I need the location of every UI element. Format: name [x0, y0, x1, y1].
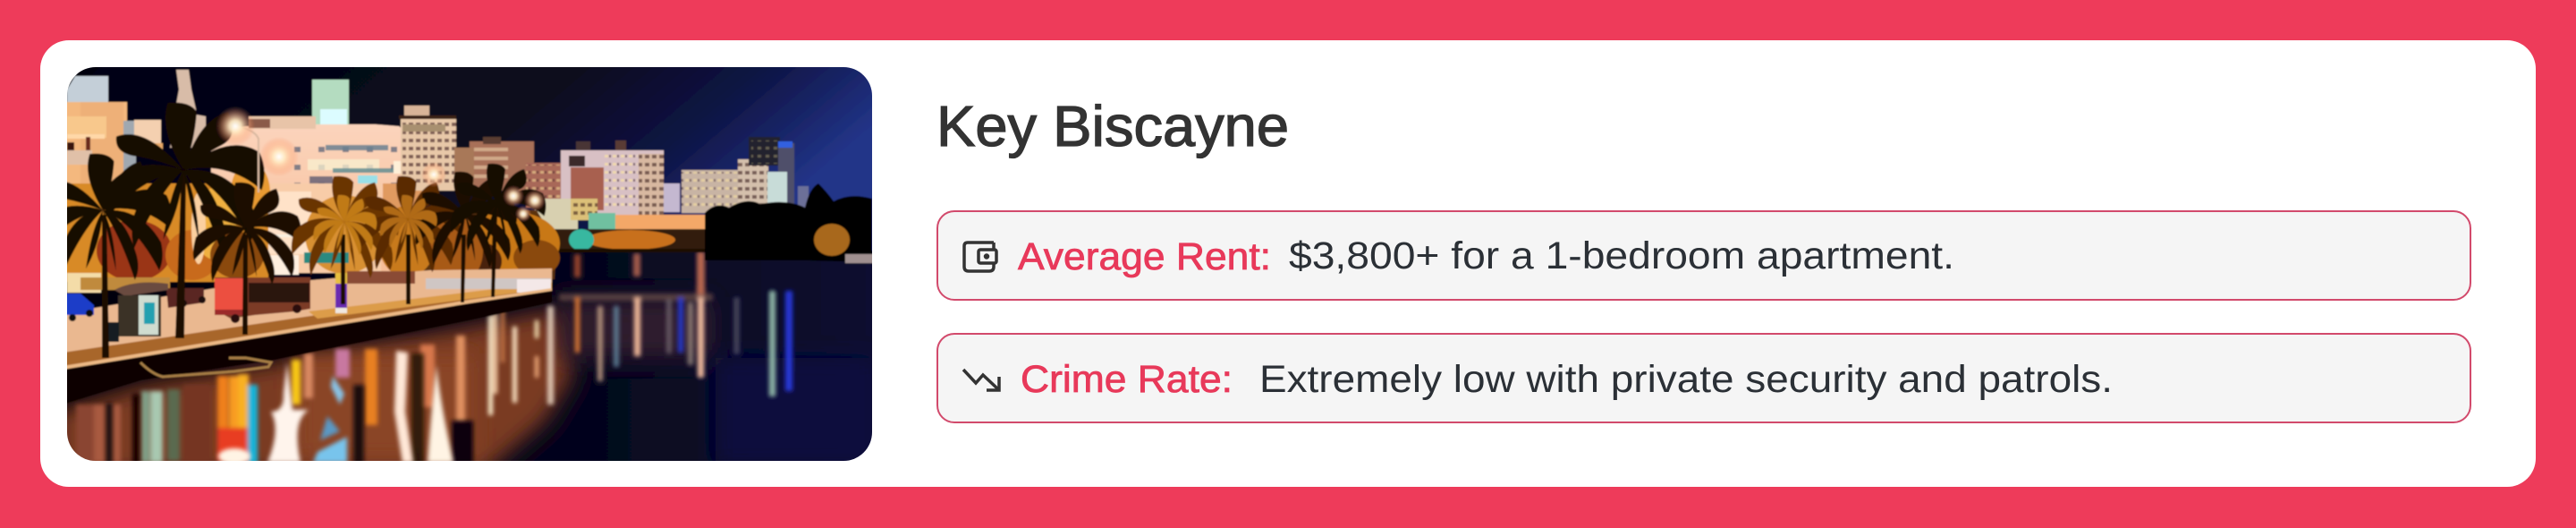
boat — [140, 358, 271, 377]
label: average rent: Average Rent: — [1018, 235, 1271, 278]
navy haze lower right — [716, 358, 877, 465]
railing — [426, 278, 551, 293]
blue car — [63, 294, 94, 321]
palm trees — [38, 103, 546, 285]
parked cars — [347, 271, 415, 284]
condo tower right of hotel — [399, 106, 474, 191]
amber foliage band behind palms — [63, 162, 483, 285]
night sky — [67, 67, 872, 251]
street lamps — [216, 106, 546, 222]
purple sign — [335, 273, 347, 313]
embankment wall — [63, 290, 552, 405]
central hotel — [211, 116, 428, 273]
bus shelter — [106, 283, 168, 342]
icon: wallet — [964, 243, 996, 271]
grass verge — [67, 292, 519, 366]
reflections right — [559, 251, 792, 396]
panel: crime rate — [937, 334, 2470, 422]
icon: trending down arrow — [963, 370, 999, 390]
red truck — [166, 288, 206, 308]
spire — [170, 70, 206, 148]
tree trunks — [102, 170, 497, 358]
bus — [215, 277, 310, 323]
value: rent: $3,800+ for a 1-bedroom apartment. — [1289, 234, 1954, 277]
teal penthouse — [312, 80, 349, 126]
photo: waterfront skyline at night — [38, 63, 877, 474]
left building — [67, 100, 165, 184]
label: crime rate: Crime Rate: — [1021, 358, 1233, 401]
reflections left — [76, 336, 465, 464]
value: crime: Extremely low with private security and patrols. — [1259, 358, 2113, 401]
panel: average rent — [937, 211, 2470, 300]
purple haze mid water — [559, 297, 716, 360]
water base — [63, 251, 877, 465]
heading: Key Biscayne — [936, 94, 1289, 158]
white tower left — [67, 75, 109, 103]
warm water glow left — [54, 309, 572, 474]
waterfront road — [63, 268, 552, 360]
shoreline foliage — [416, 183, 877, 281]
dark gaps in warm water — [106, 353, 473, 465]
distant skyline right — [469, 136, 810, 231]
bright light streaks — [218, 306, 554, 464]
